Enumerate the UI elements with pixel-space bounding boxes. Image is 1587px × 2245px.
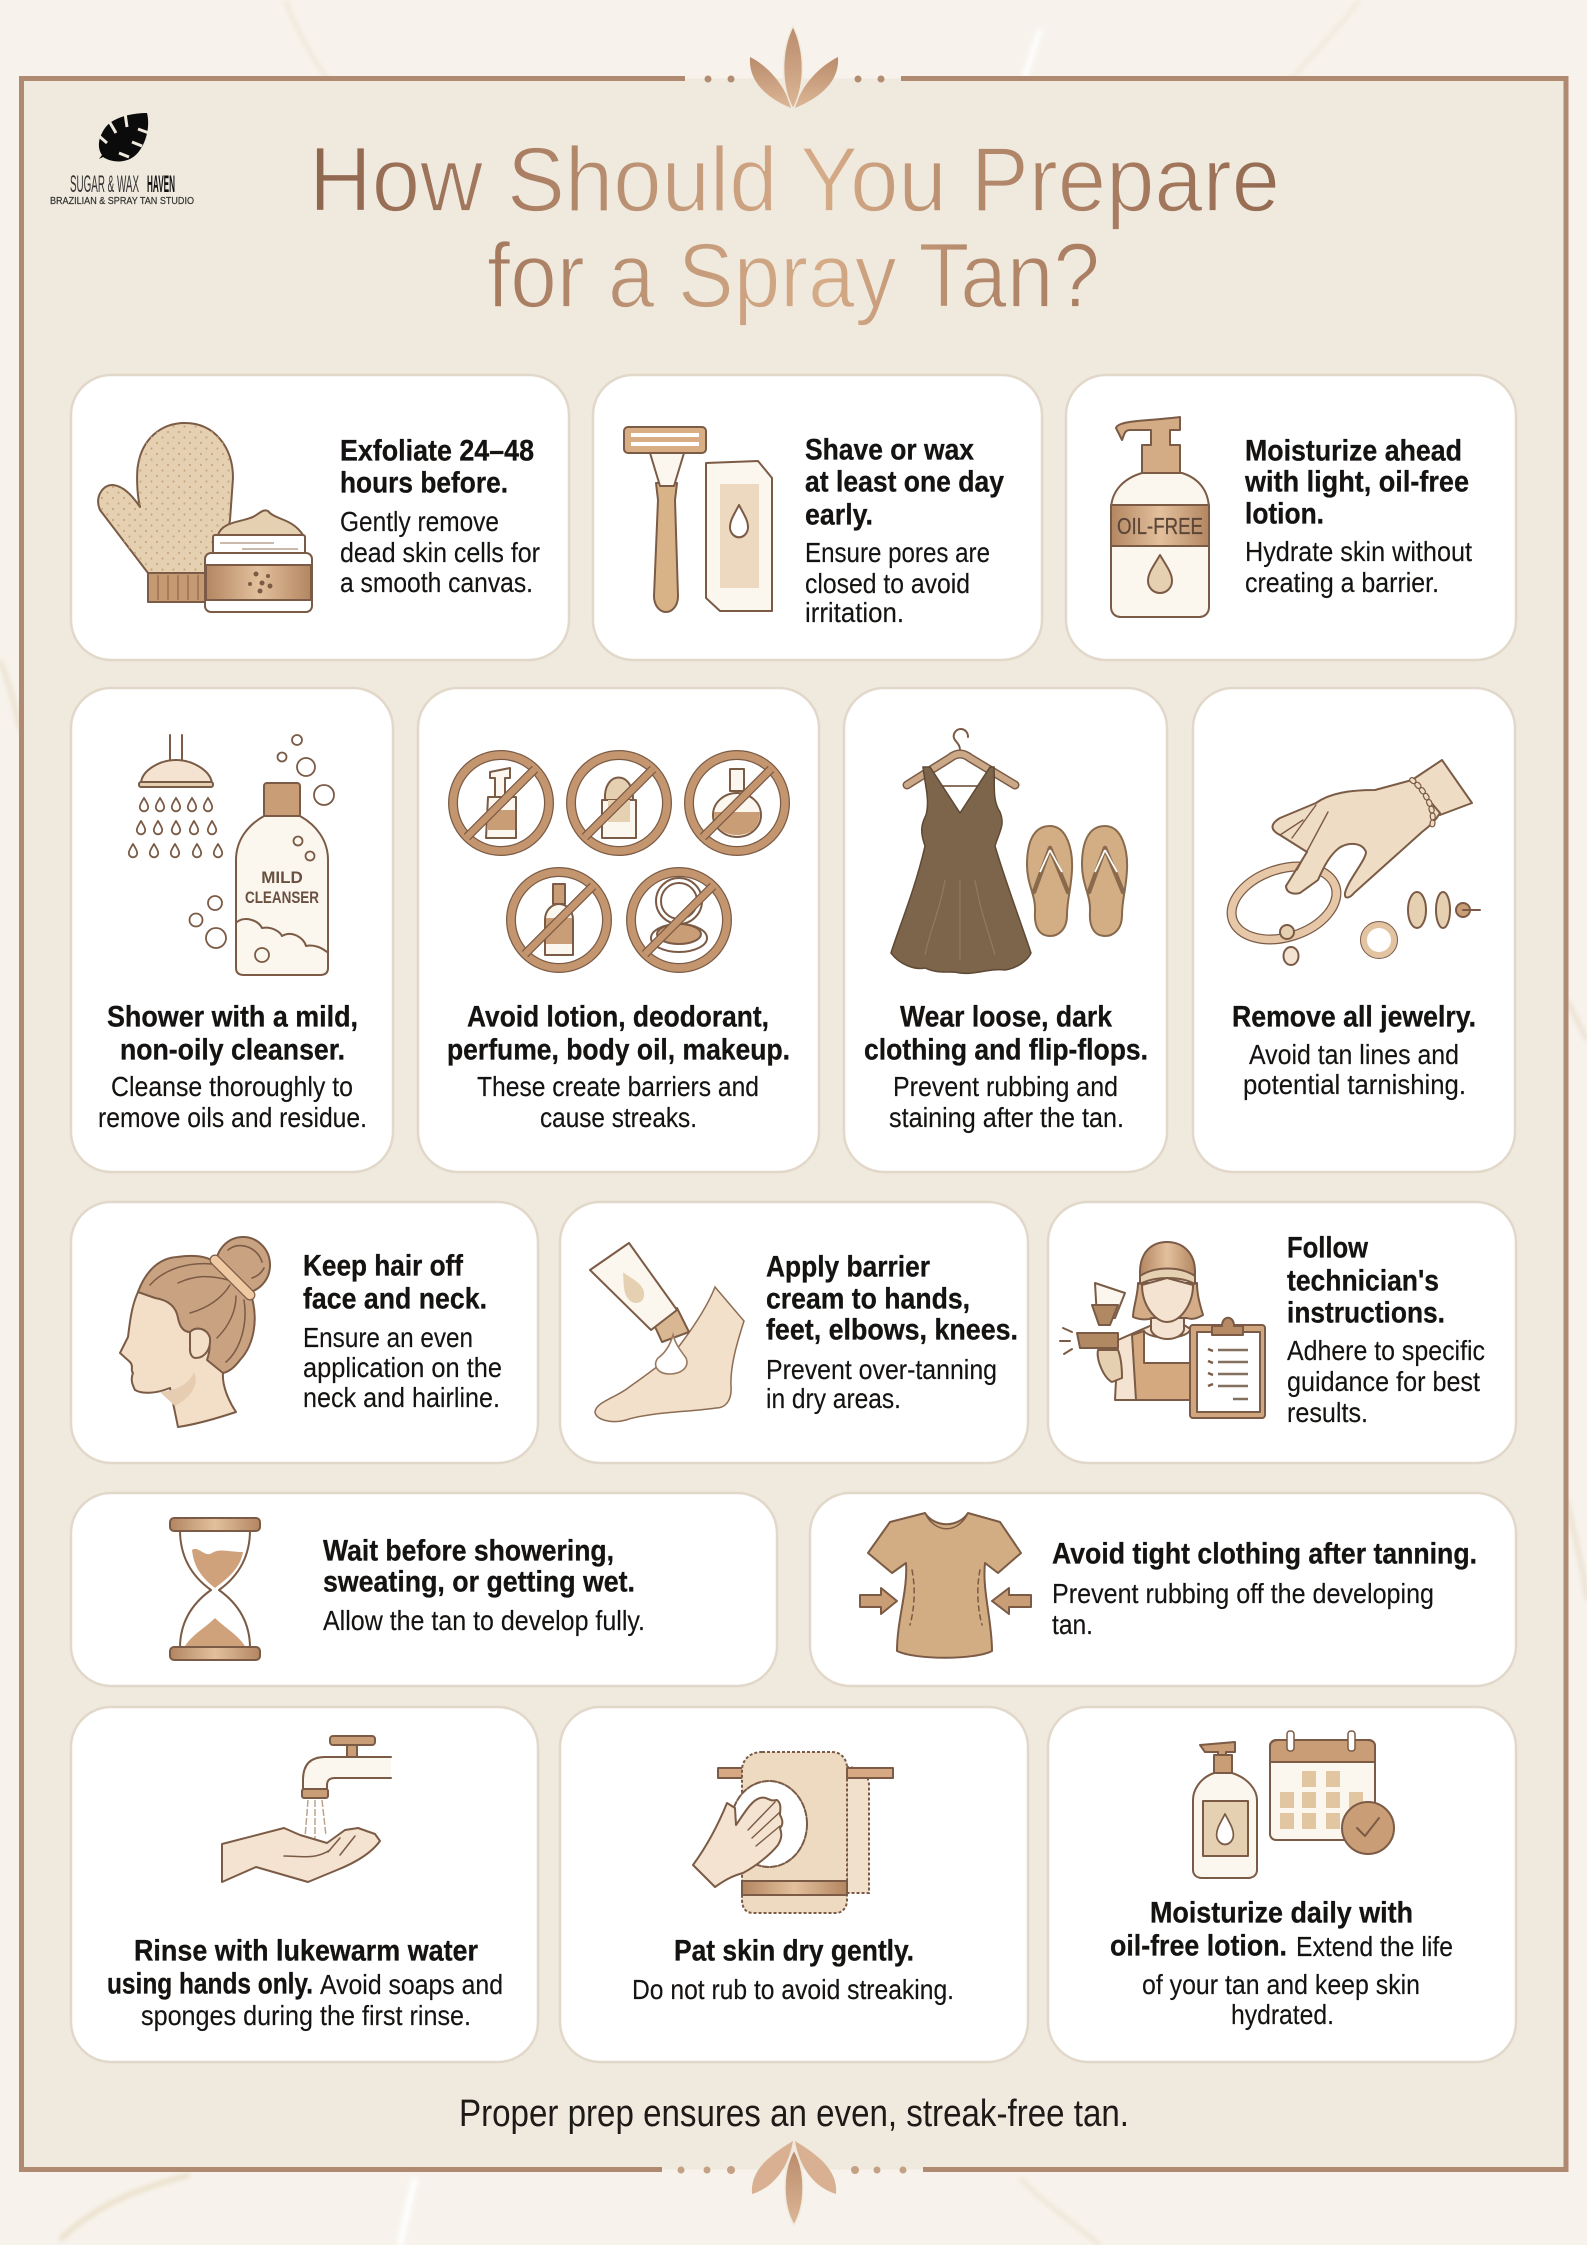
body text: closed to avoid [805,568,970,599]
icon: hand patting towel [693,1752,893,1913]
bottom ornament [678,2141,906,2225]
heading: instructions. [1287,1296,1445,1329]
body text: Do not rub to avoid streaking. [632,1974,954,2005]
panel: rinse [71,1707,538,2062]
heading: clothing and flip-flops. [864,1033,1148,1066]
heading [107,1934,478,2000]
body text: in dry areas. [766,1383,901,1414]
body text: Gently remove [340,506,499,537]
body text: hydrated. [1231,1999,1334,2030]
panel: moisturize ahead [1066,375,1516,660]
heading: oil-free lotion. [1110,1929,1287,1962]
heading: Moisturize daily with [1150,1896,1413,1929]
body text [805,537,990,628]
body text: Adhere to specific [1287,1335,1485,1366]
icon: dark dress on hanger and flip-flops [891,729,1127,973]
body text: results. [1287,1397,1368,1428]
body text: Hydrate skin without [1245,536,1472,567]
body text [1287,1335,1485,1428]
heading [1244,434,1469,530]
panel: barrier cream [560,1202,1028,1463]
panel: wear loose clothing [844,688,1167,1172]
heading: sweating, or getting wet. [323,1565,635,1598]
heading [1287,1231,1445,1329]
body text: cause streaks. [540,1102,697,1133]
heading: Avoid tight clothing after tanning. [1052,1537,1477,1570]
body text: sponges during the first rinse. [141,2000,471,2031]
heading: hours before. [340,466,508,499]
panel: follow technician [1048,1202,1516,1463]
heading: Pat skin dry gently. [674,1934,914,1967]
icon: head profile with hair bun [120,1237,270,1427]
heading [766,1250,1018,1346]
icon: left flip-flop [1027,826,1072,936]
icon: no body oil [511,872,607,968]
body text: staining after the tan. [889,1102,1124,1133]
title: for a Spray Tan? [487,225,1100,327]
body text [1245,536,1472,598]
panel: shower [71,688,393,1172]
heading: feet, elbows, knees. [766,1313,1018,1346]
footer tagline: Proper prep ensures an even, streak-free tan. [459,2093,1129,2135]
heading: Rinse with lukewarm water [134,1934,478,1967]
icon: oil-free lotion bottle: OIL-FREE [1117,513,1203,539]
body text [98,1071,367,1133]
body text: Extend the life [1296,1931,1453,1962]
heading: non-oily cleanser. [120,1033,345,1066]
title [309,129,1280,327]
body text: guidance for best [1287,1366,1480,1397]
logo: SUGAR & WAX [70,171,139,198]
body text: These create barriers and [477,1071,759,1102]
heading [447,1000,790,1066]
body text: a smooth canvas. [340,567,533,598]
heading: face and neck. [303,1282,487,1315]
icon: lotion bottle and calendar [1193,1731,1394,1878]
body text [340,506,540,598]
body text: of your tan and keep skin [1142,1969,1420,2000]
panel: wait before showering [71,1493,777,1686]
icon: no deodorant [571,755,667,851]
body text: Avoid soaps and [320,1969,503,2000]
heading: Follow [1287,1231,1368,1264]
icon: shower head and mild cleanser bottle: CLEANSER [245,888,319,907]
icon: no perfume [689,755,785,851]
icon: spray tan technician with spray gun and clipboard [1060,1242,1265,1418]
panel: pat dry [560,1707,1028,2062]
heading: lotion. [1245,497,1324,530]
icon: right flip-flop [1082,826,1127,936]
logo: HAVEN [147,171,175,198]
heading: Wear loose, dark [900,1000,1113,1033]
body text [477,1071,759,1133]
heading [864,1000,1148,1066]
title: How Should You Prepare [309,129,1280,231]
panel: shave or wax [593,375,1042,660]
body text: Prevent over-tanning [766,1354,997,1385]
top ornament [704,26,884,109]
icon: faucet and cupped hand [222,1736,391,1882]
heading [323,1534,635,1598]
heading: Keep hair off [303,1249,463,1282]
icon: hourglass [170,1518,260,1660]
body text [141,1969,503,2031]
icon: shower head and mild cleanser bottle [129,735,334,975]
body text: Ensure pores are [805,537,990,568]
heading: at least one day [805,465,1005,498]
heading: Exfoliate 24–48 [340,434,534,467]
icon: monstera leaf [99,113,149,161]
body text: Ensure an even [303,1322,473,1353]
heading: technician's [1287,1264,1439,1297]
heading [303,1249,487,1315]
icon: hand removing jewelry [1222,760,1480,965]
body text [303,1322,502,1413]
body text: potential tarnishing. [1243,1069,1466,1100]
body text [766,1354,997,1414]
icon: t-shirt with inward arrows [860,1513,1031,1658]
panel: remove jewelry [1193,688,1515,1172]
icon: cream tube and foot [590,1243,744,1422]
panel: hair off face [71,1202,538,1463]
body text: Prevent rubbing and [893,1071,1118,1102]
panel: moisturize daily [1048,1707,1516,2062]
heading: Remove all jewelry. [1232,1000,1476,1033]
heading [107,1000,358,1066]
body text [889,1071,1124,1133]
heading: Moisturize ahead [1245,434,1462,467]
heading: using hands only. [107,1967,313,2000]
heading: with light, oil-free [1244,465,1469,498]
heading: Wait before showering, [323,1534,614,1567]
heading [340,434,534,499]
logo [50,113,194,207]
panel: exfoliate [71,375,569,660]
heading [805,433,1005,531]
heading: Apply barrier [766,1250,930,1283]
body text: creating a barrier. [1245,567,1439,598]
panel: avoid tight clothing [810,1493,1516,1686]
icon: five prohibited products [453,755,785,968]
body text: neck and hairline. [303,1382,500,1413]
body text: application on the [303,1352,502,1383]
body text [1142,1931,1453,2030]
body text: irritation. [805,597,904,628]
icon: shower head and mild cleanser bottle: MILD [261,868,303,887]
body text [1243,1039,1466,1100]
icon: oil-free lotion bottle [1111,417,1209,617]
icon: exfoliating mitt and scrub jar [98,423,312,612]
body text [1052,1578,1434,1640]
heading: cream to hands, [766,1282,970,1315]
body text: remove oils and residue. [98,1102,367,1133]
body text: tan. [1052,1609,1093,1640]
heading [1110,1896,1413,1962]
heading: Shower with a mild, [107,1000,358,1033]
icon: no lotion [453,755,549,851]
heading: Shave or wax [805,433,975,466]
heading: perfume, body oil, makeup. [447,1033,790,1066]
panel: avoid products [418,688,819,1172]
heading: Avoid lotion, deodorant, [467,1000,769,1033]
heading: early. [805,498,873,531]
body text: dead skin cells for [340,537,540,568]
icon: razor and wax strip [624,427,772,612]
body text: Cleanse thoroughly to [111,1071,353,1102]
body text: Avoid tan lines and [1249,1039,1459,1070]
body text: Prevent rubbing off the developing [1052,1578,1434,1609]
icon: no makeup compact [631,872,727,968]
logo: BRAZILIAN & SPRAY TAN STUDIO [50,196,194,207]
body text: Allow the tan to develop fully. [323,1605,645,1636]
